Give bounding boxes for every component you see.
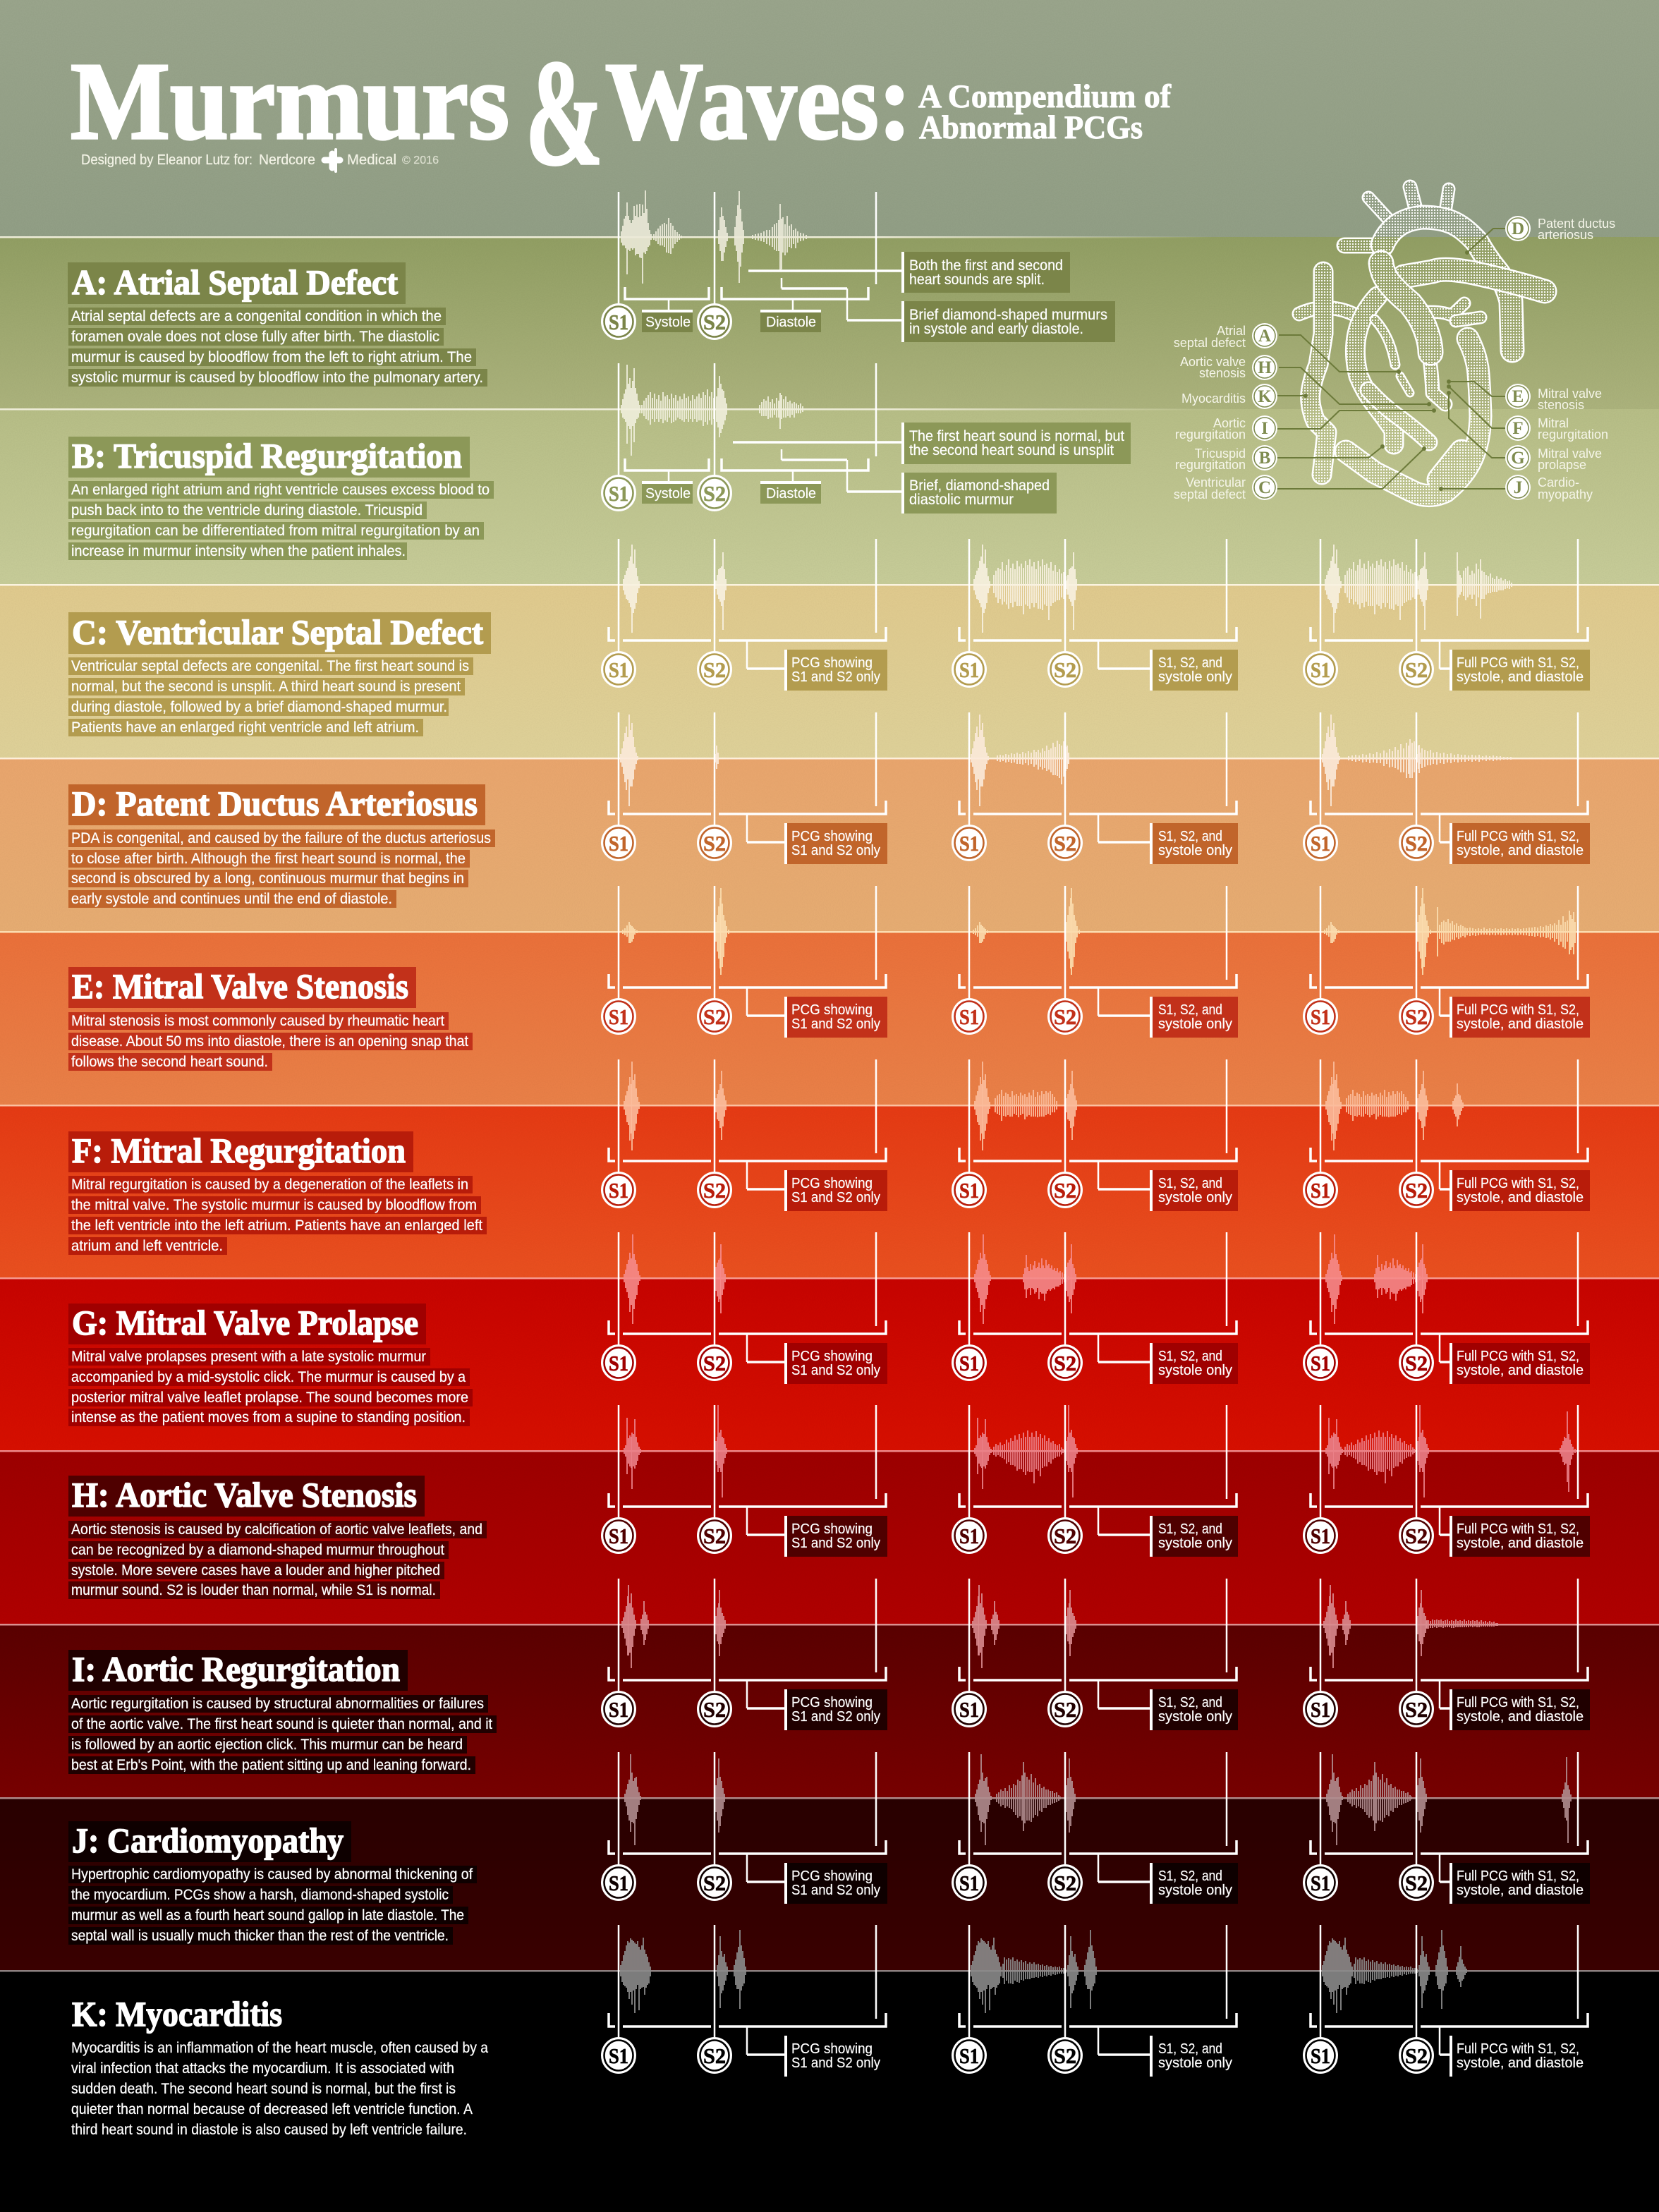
PCG: S1 and S2 only G: PCG showing xyxy=(791,1349,873,1364)
callouts A: Brief diamond-shaped murmurs xyxy=(909,307,1107,323)
PCG: S1 and S2 only I: S2 xyxy=(703,1697,726,1722)
panel: A Atrial Septal Defect xyxy=(68,190,1115,387)
legend labels left: stenosis xyxy=(1199,366,1246,380)
legend labels right: prolapse xyxy=(1538,458,1586,472)
Systole and Diastole labels A: Diastole xyxy=(766,315,816,330)
callouts B: Brief, diamond-shaped xyxy=(909,478,1050,494)
main title: Murmurs xyxy=(71,40,509,162)
PCG: S1, S2 and systole I: S1, S2, and xyxy=(1158,1695,1222,1710)
PCG: S1, S2 and systole F xyxy=(952,1059,1238,1211)
description C: during diastole, followed by a brief diamond-shaped murmur. xyxy=(71,699,447,715)
description A: systolic murmur is caused by bloodflow into the pulmonary artery. xyxy=(71,370,483,386)
PCG: full H: S1 xyxy=(1311,1524,1330,1548)
heading G: G: Mitral Valve Prolapse xyxy=(72,1303,418,1342)
PCG: S1, S2 and systole D: S1, S2, and xyxy=(1158,829,1222,844)
PCG: full F: Full PCG with S1, S2, xyxy=(1457,1176,1579,1191)
PCG: S1 and S2 only H xyxy=(601,1405,887,1557)
PCG: S1 and S2 only D: S2 xyxy=(703,831,726,856)
legend labels left: Tricuspid xyxy=(1195,446,1246,461)
legend labels left: regurgitation xyxy=(1175,427,1246,442)
PCG frame B: S1 xyxy=(609,481,628,506)
PCG: S1 and S2 only I: PCG showing xyxy=(791,1695,873,1710)
PCG: S1, S2 and systole J: S1, S2, and xyxy=(1158,1868,1222,1884)
PCG: S1, S2 and systole K: S2 xyxy=(1054,2043,1076,2068)
PCG: S1 and S2 only G: S1 xyxy=(609,1351,628,1375)
PCG: S1, S2 and systole C: S2 xyxy=(1054,657,1076,682)
PCG: S1 and S2 only G: S2 xyxy=(703,1351,726,1375)
PCG: S1 and S2 only K xyxy=(601,1925,887,2077)
legend labels left: Ventricular xyxy=(1186,475,1246,490)
description K: sudden death. The second heart sound is normal, but the first is xyxy=(71,2081,456,2097)
callouts A: Both the first and second xyxy=(909,257,1063,274)
description K xyxy=(71,2040,488,2138)
PCG: full F xyxy=(1303,1059,1590,1211)
PCG: S1, S2 and systole K: S1, S2, and xyxy=(1158,2041,1222,2057)
description B: increase in murmur intensity when the patient inhales. xyxy=(71,543,406,559)
PCG: S1, S2 and systole J: S1 xyxy=(959,1871,979,1895)
PCG: full I xyxy=(1303,1579,1590,1730)
description G: accompanied by a mid-systolic click. The murmur is caused by a xyxy=(71,1369,466,1385)
legend badges: K xyxy=(1258,387,1272,406)
description F: the left ventricle into the left atrium. Patients have an enlarged left xyxy=(71,1217,482,1234)
PCG: S1 and S2 only F: S1 xyxy=(609,1178,628,1203)
description I: of the aortic valve. The first heart sound is quieter than normal, and it xyxy=(71,1716,492,1732)
PCG: S1 and S2 only E xyxy=(601,886,887,1038)
description G: posterior mitral valve leaflet prolapse. The sound becomes more xyxy=(71,1390,468,1406)
description G xyxy=(68,1348,473,1426)
PCG: S1 and S2 only K: S1 xyxy=(609,2043,628,2068)
description F: the mitral valve. The systolic murmur is caused by bloodflow from xyxy=(71,1197,477,1213)
panel: H Aortic Valve Stenosis xyxy=(68,1405,1590,1599)
description K: Myocarditis is an inflammation of the heart muscle, often caused by a xyxy=(71,2040,488,2056)
PCG: full J xyxy=(1303,1752,1590,1904)
callouts A xyxy=(901,252,1115,342)
description F: Mitral regurgitation is caused by a degeneration of the leaflets in xyxy=(71,1177,468,1193)
Systole and Diastole labels A: Systole xyxy=(645,315,691,330)
heading D: D: Patent Ductus Arteriosus xyxy=(72,784,478,823)
description H: can be recognized by a diamond-shaped murmur throughout xyxy=(71,1542,444,1558)
legend badges: D xyxy=(1512,219,1524,238)
description A: foramen ovale does not close fully after birth. The diastolic xyxy=(71,329,439,345)
panel: K Myocarditis xyxy=(71,1925,1590,2138)
PCG: S1, S2 and systole C: S1, S2, and xyxy=(1158,655,1222,671)
PCG: S1, S2 and systole I xyxy=(952,1579,1238,1730)
legend labels left: Aortic valve xyxy=(1180,355,1246,369)
description D: to close after birth. Although the first heart sound is normal, the xyxy=(71,851,466,867)
legend labels right xyxy=(1538,217,1615,502)
subtitle: Abnormal PCGs xyxy=(919,109,1143,146)
PCG: S1, S2 and systole I: S1 xyxy=(959,1697,979,1722)
PCG: full J: S2 xyxy=(1405,1871,1428,1895)
legend labels right: myopathy xyxy=(1538,487,1593,502)
description I: best at Erb's Point, with the patient sitting up and leaning forward. xyxy=(71,1757,471,1773)
main title: & xyxy=(525,28,603,197)
description J: Hypertrophic cardiomyopathy is caused by abnormal thickening of xyxy=(71,1866,473,1883)
PCG: S1, S2 and systole G: systole only xyxy=(1158,1363,1232,1378)
PCG: S1 and S2 only E: S2 xyxy=(703,1004,726,1029)
legend labels left: septal defect xyxy=(1174,487,1246,502)
leader lines to heart regions xyxy=(1277,229,1506,491)
heading A: A: Atrial Septal Defect xyxy=(72,262,398,302)
PCG: S1, S2 and systole H: S2 xyxy=(1054,1524,1076,1548)
PCG: full F: S2 xyxy=(1405,1178,1428,1203)
PCG: S1, S2 and systole G: S1 xyxy=(959,1351,979,1375)
PCG: S1, S2 and systole H xyxy=(952,1405,1238,1557)
PCG: S1, S2 and systole G xyxy=(952,1232,1238,1384)
description B: An enlarged right atrium and right ventricle causes excess blood to xyxy=(71,482,490,498)
description C: Ventricular septal defects are congenital. The first heart sound is xyxy=(71,658,469,674)
PCG: S1 and S2 only G: S1 and S2 only xyxy=(791,1363,880,1378)
PCG: full H: Full PCG with S1, S2, xyxy=(1457,1521,1579,1537)
PCG: S1 and S2 only D xyxy=(601,712,887,864)
PCG: full C: systole, and diastole xyxy=(1457,669,1584,685)
Systole and Diastole labels B: Diastole xyxy=(766,486,816,502)
description J: murmur as well as a fourth heart sound gallop in late diastole. The xyxy=(71,1907,464,1924)
PCG: full G: Full PCG with S1, S2, xyxy=(1457,1349,1579,1364)
credits: Designed by Eleanor Lutz for: xyxy=(81,152,253,168)
PCG: S1 and S2 only I: S1 xyxy=(609,1697,628,1722)
panel: G Mitral Valve Prolapse xyxy=(68,1232,1590,1426)
description G: Mitral valve prolapses present with a late systolic murmur xyxy=(71,1349,426,1365)
PCG: S1, S2 and systole I: S2 xyxy=(1054,1697,1076,1722)
PCG: S1, S2 and systole F: systole only xyxy=(1158,1190,1232,1205)
description D: early systole and continues until the end of diastole. xyxy=(71,891,392,907)
PCG: S1 and S2 only D: S1 and S2 only xyxy=(791,843,880,858)
PCG: full E: systole, and diastole xyxy=(1457,1016,1584,1032)
heading F: F: Mitral Regurgitation xyxy=(72,1131,406,1170)
PCG: S1 and S2 only K: S2 xyxy=(703,2043,726,2068)
description H: murmur sound. S2 is louder than normal, while S1 is normal. xyxy=(71,1582,436,1598)
PCG: full E: S2 xyxy=(1405,1004,1428,1029)
PCG: full D xyxy=(1303,712,1590,864)
description E: follows the second heart sound. xyxy=(71,1054,268,1070)
credits xyxy=(81,152,439,168)
PCG: S1 and S2 only J: S1 and S2 only xyxy=(791,1883,880,1898)
heading C: C: Ventricular Septal Defect xyxy=(72,612,483,652)
legend badges: C xyxy=(1258,478,1271,497)
description E: disease. About 50 ms into diastole, there is an opening snap that xyxy=(71,1033,468,1050)
callouts A: in systole and early diastole. xyxy=(909,321,1083,337)
PCG: full D: systole, and diastole xyxy=(1457,843,1584,858)
callouts B: The first heart sound is normal, but xyxy=(909,428,1124,444)
PCG: S1 and S2 only K: S1 and S2 only xyxy=(791,2055,880,2071)
heading E: E: Mitral Valve Stenosis xyxy=(72,966,408,1006)
PCG: full C: Full PCG with S1, S2, xyxy=(1457,655,1579,671)
PCG: S1 and S2 only E: PCG showing xyxy=(791,1002,873,1018)
PCG: S1 and S2 only J: S1 xyxy=(609,1871,628,1895)
PCG: S1 and S2 only D: PCG showing xyxy=(791,829,873,844)
PCG: full E: S1 xyxy=(1311,1004,1330,1029)
PCG: S1 and S2 only G xyxy=(601,1232,887,1384)
legend labels right: regurgitation xyxy=(1538,427,1608,442)
legend badges: E xyxy=(1512,387,1524,406)
PCG: S1, S2 and systole G: S2 xyxy=(1054,1351,1076,1375)
PCG: S1, S2 and systole K: S1 xyxy=(959,2043,979,2068)
PCG: S1 and S2 only F: S2 xyxy=(703,1178,726,1203)
legend badges: F xyxy=(1512,419,1524,438)
PCG: S1 and S2 only C xyxy=(601,539,887,691)
PCG: S1 and S2 only F xyxy=(601,1059,887,1211)
PCG: S1, S2 and systole D: S1 xyxy=(959,831,979,856)
legend labels left: Myocarditis xyxy=(1181,391,1246,406)
credits: Nerdcore xyxy=(259,152,315,168)
heading J: J: Cardiomyopathy xyxy=(72,1821,344,1860)
description J: the myocardium. PCGs show a harsh, diamond-shaped systolic xyxy=(71,1887,449,1903)
PCG: S1 and S2 only H: S1 and S2 only xyxy=(791,1536,880,1551)
PCG: full D: S1 xyxy=(1311,831,1330,856)
description C: Patients have an enlarged right ventricle and left atrium. xyxy=(71,719,419,736)
description B: regurgitation can be differentiated from mitral regurgitation by an xyxy=(71,523,480,539)
PCG frame A xyxy=(601,192,901,340)
Systole and Diastole labels A xyxy=(642,310,821,332)
PCG: S1, S2 and systole I: systole only xyxy=(1158,1709,1232,1725)
PCG: full C: S2 xyxy=(1405,657,1428,682)
PCG waveform B xyxy=(621,365,803,456)
PCG: full I: Full PCG with S1, S2, xyxy=(1457,1695,1579,1710)
PCG: S1 and S2 only H: S1 xyxy=(609,1524,628,1548)
legend badges: G xyxy=(1511,449,1525,468)
PCG: full K: S2 xyxy=(1405,2043,1428,2068)
PCG: full G: S1 xyxy=(1311,1351,1330,1375)
PCG: full J: S1 xyxy=(1311,1871,1330,1895)
subtitle xyxy=(918,78,1172,146)
Systole and Diastole labels B xyxy=(642,481,821,504)
legend labels right: Mitral valve xyxy=(1538,446,1602,461)
PCG: full I: S2 xyxy=(1405,1697,1428,1722)
PCG: S1, S2 and systole C xyxy=(952,539,1238,691)
PCG: full E: Full PCG with S1, S2, xyxy=(1457,1002,1579,1018)
legend labels left xyxy=(1174,324,1246,502)
PCG: full J: Full PCG with S1, S2, xyxy=(1457,1868,1579,1884)
PCG: full C: S1 xyxy=(1311,657,1330,682)
description B xyxy=(68,481,494,560)
PCG frame A: S2 xyxy=(703,310,726,334)
description D: second is obscured by a long, continuous murmur that begins in xyxy=(71,870,464,887)
PCG: S1, S2 and systole D: systole only xyxy=(1158,843,1232,858)
PCG frame B xyxy=(601,363,901,511)
legend labels right: arteriosus xyxy=(1538,228,1593,242)
PCG: S1, S2 and systole C: systole only xyxy=(1158,669,1232,685)
callouts B: the second heart sound is unsplit xyxy=(909,442,1114,458)
heading B: B: Tricuspid Regurgitation xyxy=(72,436,462,475)
description J xyxy=(68,1866,477,1945)
PCG: S1, S2 and systole E: S1, S2, and xyxy=(1158,1002,1222,1018)
callouts A: heart sounds are split. xyxy=(909,272,1045,288)
legend badges: H xyxy=(1258,358,1272,377)
description H: Aortic stenosis is caused by calcification of aortic valve leaflets, and xyxy=(71,1521,482,1538)
PCG: S1, S2 and systole F: S2 xyxy=(1054,1178,1076,1203)
panel: I Aortic Regurgitation xyxy=(68,1579,1590,1774)
PCG: S1 and S2 only C: S1 xyxy=(609,657,628,682)
legend labels right: Cardio- xyxy=(1538,475,1579,490)
PCG: S1, S2 and systole F: S1 xyxy=(959,1178,979,1203)
description D: PDA is congenital, and caused by the failure of the ductus arteriosus xyxy=(71,830,491,846)
PCG: full H xyxy=(1303,1405,1590,1557)
description F xyxy=(68,1176,487,1255)
legend badges: B xyxy=(1259,449,1270,468)
PCG: S1, S2 and systole J xyxy=(952,1752,1238,1904)
legend badges xyxy=(1252,216,1531,500)
PCG: S1, S2 and systole D: S2 xyxy=(1054,831,1076,856)
description D xyxy=(68,830,495,908)
panel: E Mitral Valve Stenosis xyxy=(68,886,1590,1071)
description I xyxy=(68,1695,497,1774)
PCG: S1 and S2 only H: PCG showing xyxy=(791,1521,873,1537)
PCG: S1 and S2 only J: PCG showing xyxy=(791,1868,873,1884)
PCG: S1 and S2 only I: S1 and S2 only xyxy=(791,1709,880,1725)
PCG: S1 and S2 only C: S1 and S2 only xyxy=(791,669,880,685)
PCG: S1 and S2 only J: S2 xyxy=(703,1871,726,1895)
credits: © 2016 xyxy=(402,154,439,166)
description E xyxy=(68,1012,473,1071)
subtitle: A Compendium of xyxy=(918,78,1172,115)
PCG: S1, S2 and systole D xyxy=(952,712,1238,864)
PCG: S1, S2 and systole H: S1 xyxy=(959,1524,979,1548)
legend labels left: regurgitation xyxy=(1175,458,1246,472)
legend labels right: Mitral valve xyxy=(1538,387,1602,401)
panel: C Ventricular Septal Defect xyxy=(68,539,1590,736)
PCG: S1, S2 and systole J: S2 xyxy=(1054,1871,1076,1895)
PCG: S1, S2 and systole E: S2 xyxy=(1054,1004,1076,1029)
credits: Medical xyxy=(347,152,396,168)
description H: systole. More severe cases have a louder and higher pitched xyxy=(71,1562,440,1579)
PCG: S1, S2 and systole K: systole only xyxy=(1158,2055,1232,2071)
icon: stippled heart anatomy xyxy=(1292,179,1557,508)
legend badges: J xyxy=(1514,478,1522,497)
description I: Aortic regurgitation is caused by structural abnormalities or failures xyxy=(71,1696,484,1712)
PCG: full F: systole, and diastole xyxy=(1457,1190,1584,1205)
main title: Waves: xyxy=(605,40,911,162)
title block xyxy=(71,28,1172,197)
PCG frame A: S1 xyxy=(609,310,628,334)
legend labels left: Aortic xyxy=(1213,416,1246,430)
description G: intense as the patient moves from a supine to standing position. xyxy=(71,1409,466,1426)
PCG: full C xyxy=(1303,539,1590,691)
PCG: full G: systole, and diastole xyxy=(1457,1363,1584,1378)
main title xyxy=(71,28,911,197)
icon: Nerdcore Medical cross logo xyxy=(324,150,340,171)
legend labels right: Patent ductus xyxy=(1538,217,1615,231)
PCG: full E xyxy=(1303,886,1590,1038)
description F: atrium and left ventricle. xyxy=(71,1238,223,1254)
PCG: S1, S2 and systole C: S1 xyxy=(959,657,979,682)
heading H: H: Aortic Valve Stenosis xyxy=(72,1475,417,1514)
PCG: S1, S2 and systole G: S1, S2, and xyxy=(1158,1349,1222,1364)
description K: third heart sound in diastole is also caused by left ventricle failure. xyxy=(71,2122,467,2138)
PCG: S1 and S2 only C: S2 xyxy=(703,657,726,682)
PCG: full H: S2 xyxy=(1405,1524,1428,1548)
PCG: S1, S2 and systole J: systole only xyxy=(1158,1883,1232,1898)
panel: D Patent Ductus Arteriosus xyxy=(68,712,1590,908)
description C xyxy=(68,657,473,736)
panel: J Cardiomyopathy xyxy=(68,1752,1590,1945)
PCG: full K xyxy=(1303,1925,1590,2077)
PCG: full D: S2 xyxy=(1405,831,1428,856)
description E: Mitral stenosis is most commonly caused by rheumatic heart xyxy=(71,1013,444,1029)
PCG: S1, S2 and systole E: systole only xyxy=(1158,1016,1232,1032)
PCG: full K: S1 xyxy=(1311,2043,1330,2068)
legend badges: I xyxy=(1261,419,1268,438)
description I: is followed by an aortic ejection click. This murmur can be heard xyxy=(71,1737,463,1753)
PCG: full H: systole, and diastole xyxy=(1457,1536,1584,1551)
description H xyxy=(68,1521,487,1599)
callouts B xyxy=(901,423,1131,514)
PCG frame B: S2 xyxy=(703,481,726,506)
PCG: S1, S2 and systole H: S1, S2, and xyxy=(1158,1521,1222,1537)
PCG: full D: Full PCG with S1, S2, xyxy=(1457,829,1579,844)
Systole and Diastole labels B: Systole xyxy=(645,486,691,502)
PCG: S1, S2 and systole K xyxy=(952,1925,1238,2077)
PCG: full I: systole, and diastole xyxy=(1457,1709,1584,1725)
description J: septal wall is usually much thicker than the rest of the ventricle. xyxy=(71,1928,449,1944)
description A: murmur is caused by bloodflow from the left to right atrium. The xyxy=(71,349,472,365)
PCG: full G: S2 xyxy=(1405,1351,1428,1375)
description K: viral infection that attacks the myocardium. It is associated with xyxy=(71,2060,454,2077)
PCG: S1, S2 and systole H: systole only xyxy=(1158,1536,1232,1551)
PCG: S1, S2 and systole E xyxy=(952,886,1238,1038)
legend badges: A xyxy=(1258,327,1271,346)
PCG: S1, S2 and systole E: S1 xyxy=(959,1004,979,1029)
legend labels left: Atrial xyxy=(1217,324,1246,338)
legend labels right: Mitral xyxy=(1538,416,1569,430)
heading K: K: Myocarditis xyxy=(72,1994,282,2034)
PCG: S1 and S2 only H: S2 xyxy=(703,1524,726,1548)
PCG: S1 and S2 only D: S1 xyxy=(609,831,628,856)
legend labels right: stenosis xyxy=(1538,398,1584,412)
PCG: full J: systole, and diastole xyxy=(1457,1883,1584,1898)
description B: push back into to the ventricle during diastole. Tricuspid xyxy=(71,502,423,518)
PCG: full G xyxy=(1303,1232,1590,1384)
PCG: S1 and S2 only I xyxy=(601,1579,887,1730)
description A xyxy=(68,308,487,387)
PCG: S1 and S2 only E: S1 and S2 only xyxy=(791,1016,880,1032)
description K: quieter than normal because of decreased left ventricle function. A xyxy=(71,2101,473,2117)
panel: F Mitral Regurgitation xyxy=(68,1059,1590,1255)
PCG: S1 and S2 only C: PCG showing xyxy=(791,655,873,671)
heading I: I: Aortic Regurgitation xyxy=(72,1649,400,1689)
PCG: S1 and S2 only K: PCG showing xyxy=(791,2041,873,2057)
PCG waveform A xyxy=(621,190,806,284)
heart diagram xyxy=(1174,169,1615,522)
PCG: S1 and S2 only F: S1 and S2 only xyxy=(791,1190,880,1205)
PCG: S1 and S2 only F: PCG showing xyxy=(791,1176,873,1191)
PCG: S1 and S2 only E: S1 xyxy=(609,1004,628,1029)
PCG: full K: systole, and diastole xyxy=(1457,2055,1584,2071)
description C: normal, but the second is unsplit. A third heart sound is present xyxy=(71,679,461,695)
panel: B Tricuspid Regurgitation xyxy=(68,363,1131,560)
PCG: full K: Full PCG with S1, S2, xyxy=(1457,2041,1579,2057)
description A: Atrial septal defects are a congenital condition in which the xyxy=(71,308,442,324)
PCG: S1 and S2 only J xyxy=(601,1752,887,1904)
callouts B: diastolic murmur xyxy=(909,492,1014,508)
legend labels left: septal defect xyxy=(1174,336,1246,350)
PCG: full F: S1 xyxy=(1311,1178,1330,1203)
PCG: S1, S2 and systole F: S1, S2, and xyxy=(1158,1176,1222,1191)
PCG: full I: S1 xyxy=(1311,1697,1330,1722)
